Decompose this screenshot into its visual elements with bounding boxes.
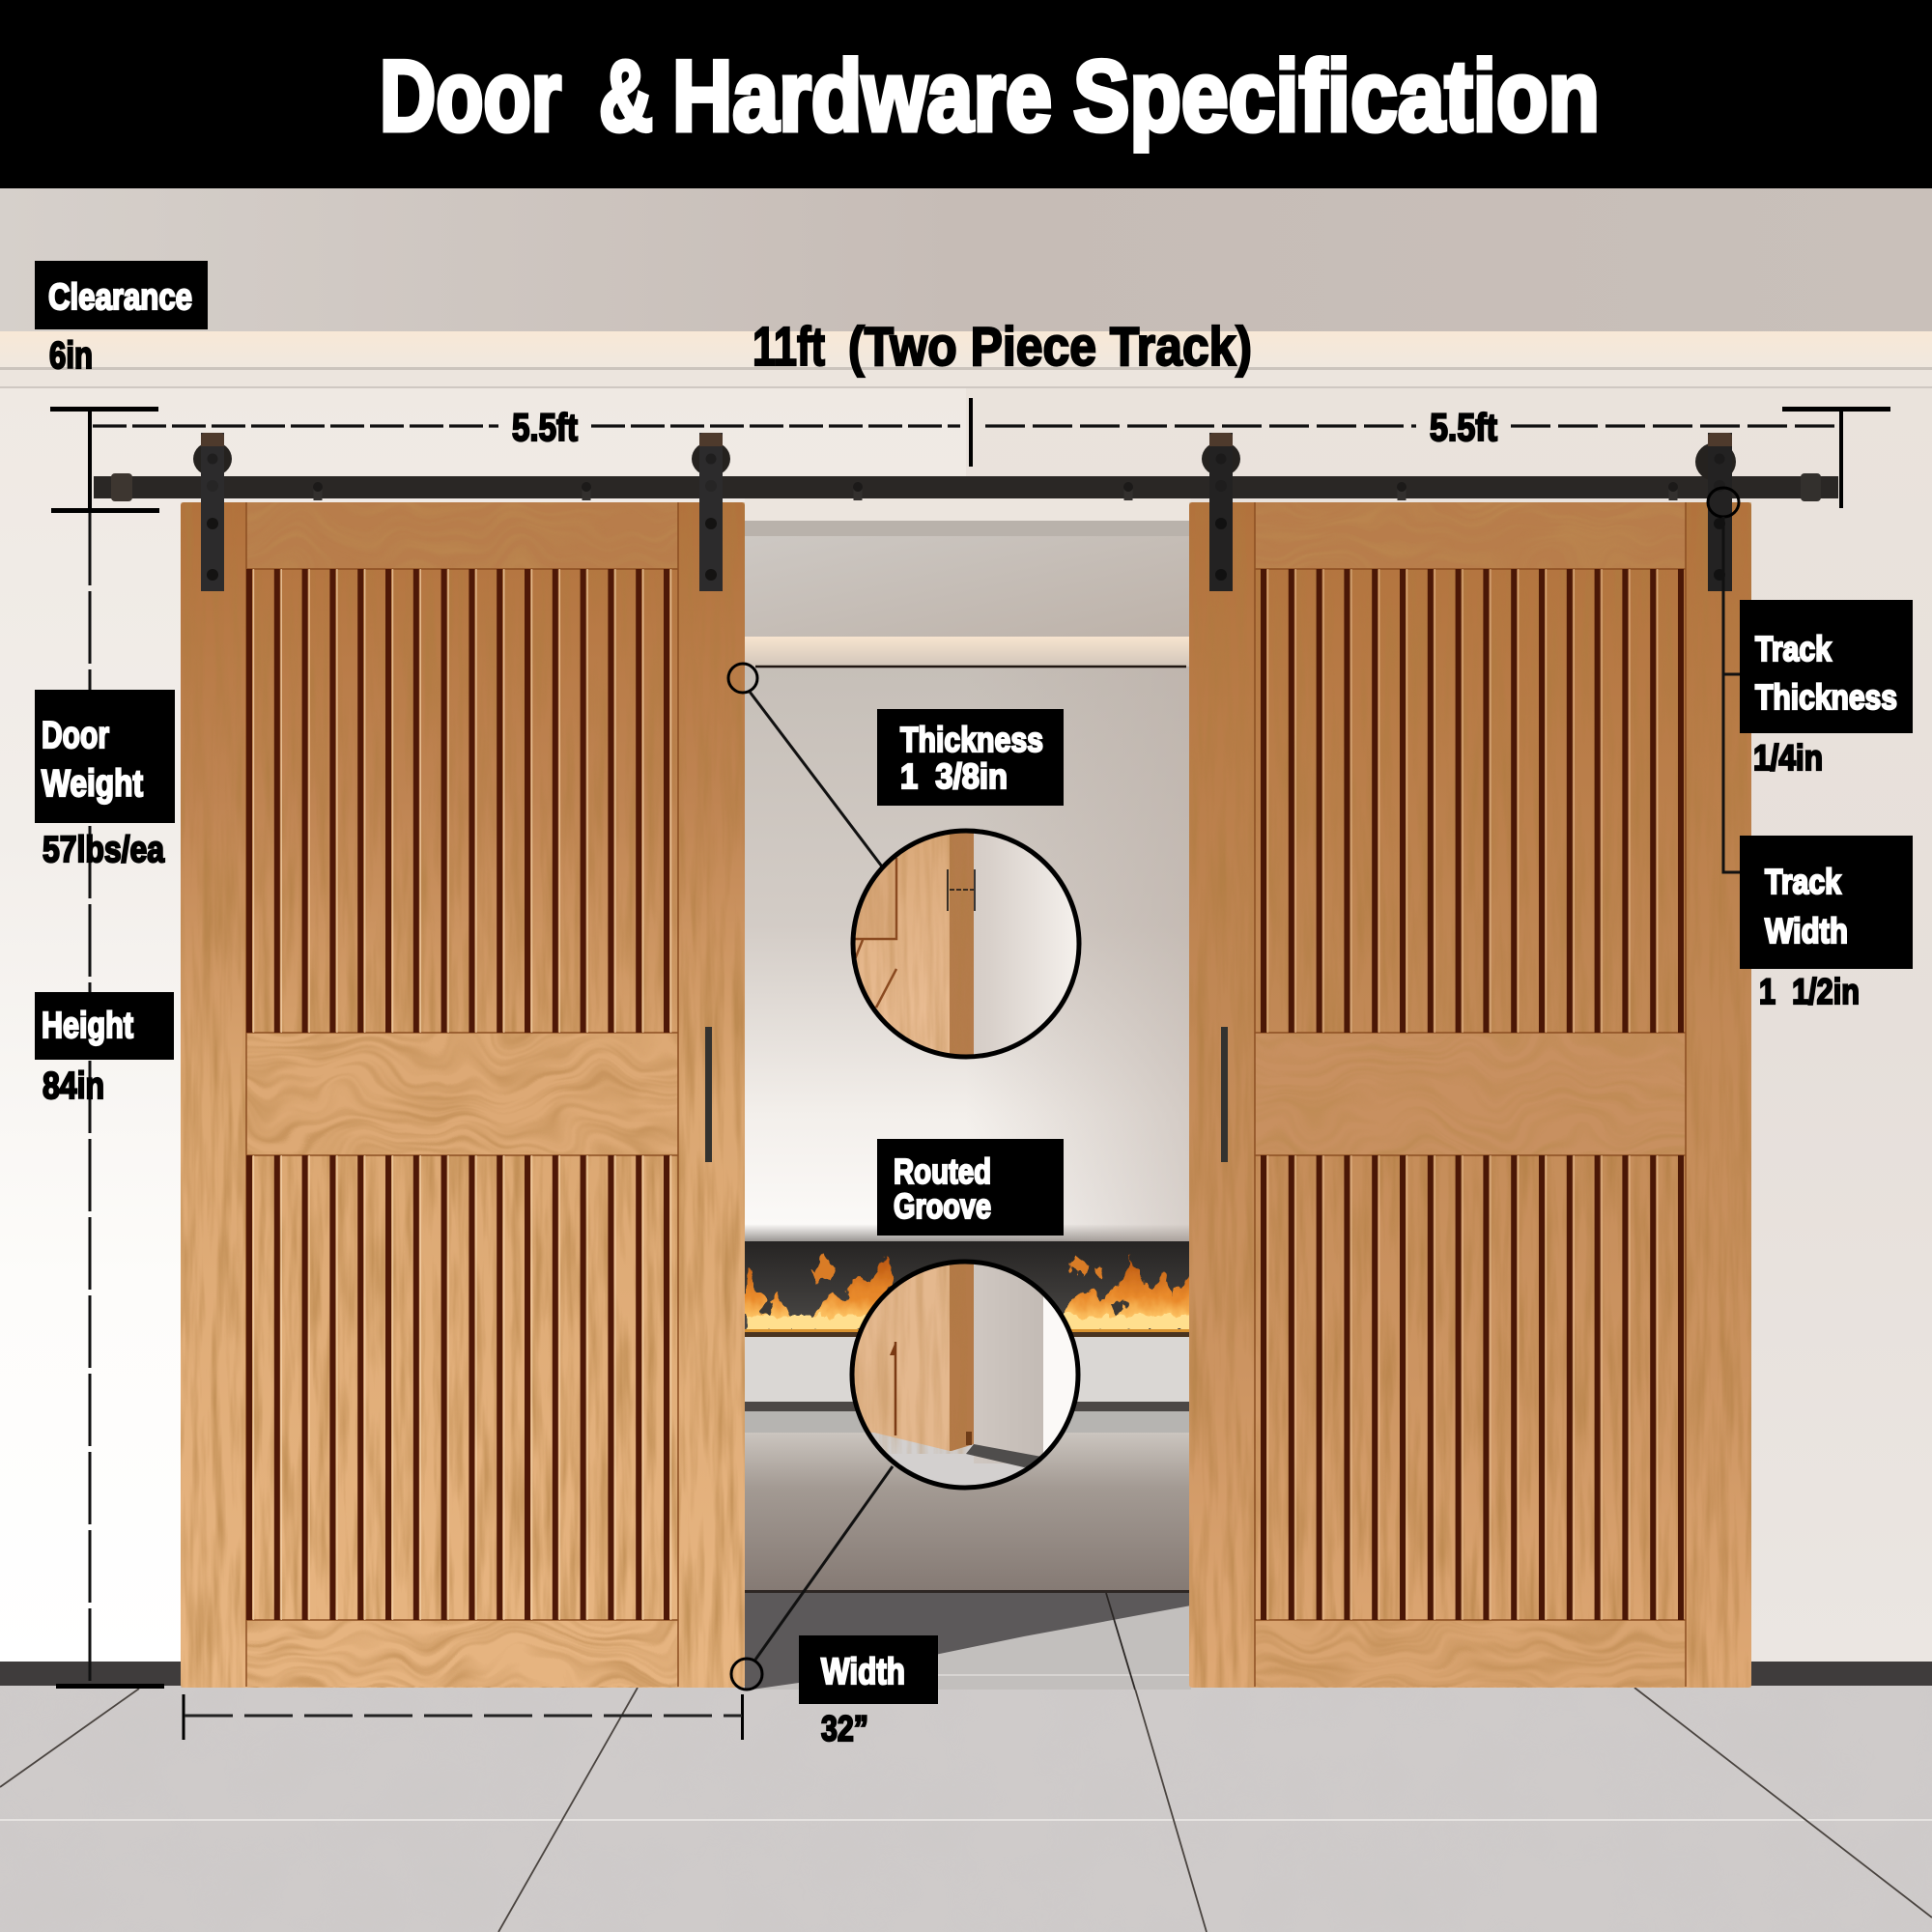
title: &	[599, 41, 653, 153]
right door rails	[1254, 502, 1687, 1687]
track stop left	[111, 473, 132, 501]
left door handle	[705, 1027, 712, 1162]
hanger 2	[692, 433, 730, 591]
track thickness callout: Thickness	[1755, 677, 1897, 717]
track thickness and width leader	[1708, 488, 1740, 872]
left door rails	[245, 502, 679, 1687]
track width callout: Track	[1765, 862, 1842, 901]
height callout	[35, 992, 174, 1107]
hanger 3	[1202, 433, 1240, 591]
clearance callout	[35, 261, 208, 377]
clearance callout: 6in	[49, 335, 93, 377]
left door grooves	[249, 569, 667, 1620]
right door	[1189, 502, 1751, 1688]
hanger 1	[193, 433, 232, 591]
door weight callout: Weight	[42, 763, 143, 805]
track length label: (Two Piece Track)	[848, 316, 1252, 378]
wall and ceiling background	[0, 188, 1932, 1663]
title: Specification	[1073, 41, 1600, 153]
track thickness callout: Track	[1755, 629, 1833, 668]
baseboard	[0, 1662, 1932, 1686]
height callout: Height	[42, 1006, 133, 1046]
height dashed dimension	[56, 513, 164, 1689]
track span dashed dimension	[93, 398, 1839, 467]
width callout: Width	[821, 1652, 905, 1692]
width callout	[799, 1635, 938, 1748]
thickness leader line	[728, 664, 1186, 867]
width callout: 32”	[821, 1709, 868, 1748]
header bar	[0, 0, 1932, 188]
thickness magnifier lens	[850, 826, 1082, 1063]
floor	[0, 1686, 1932, 1932]
thickness callout: Thickness	[900, 720, 1043, 759]
track width callout: 1 1/2in	[1759, 972, 1860, 1011]
title: Door	[380, 41, 561, 153]
door weight callout	[35, 690, 175, 870]
door weight callout: 57lbs/ea	[43, 830, 165, 870]
clearance callout: Clearance	[48, 277, 192, 318]
thickness callout: 1 3/8in	[900, 756, 1008, 796]
routed groove magnifier lens	[850, 1256, 1082, 1492]
right span label: 5.5ft	[1430, 407, 1497, 449]
track thickness callout	[1740, 600, 1913, 778]
track width callout	[1740, 836, 1913, 1011]
doorway interior scene	[745, 498, 1191, 1690]
routed groove callout: Groove	[894, 1186, 991, 1226]
fireplace band	[745, 1241, 1191, 1329]
width leader line	[731, 1466, 893, 1690]
routed groove callout	[877, 1139, 1064, 1236]
title: Hardware	[672, 41, 1052, 153]
routed groove callout: Routed	[894, 1151, 991, 1191]
track thickness callout: 1/4in	[1753, 738, 1823, 778]
right door handle	[1221, 1027, 1228, 1162]
title	[380, 41, 1600, 153]
thickness callout	[877, 709, 1064, 806]
clearance dimension bracket	[50, 407, 159, 513]
track rail	[94, 473, 1838, 501]
track stop right	[1801, 473, 1821, 501]
track width callout: Width	[1765, 911, 1848, 951]
hanger 4	[1695, 433, 1736, 591]
left door	[181, 502, 745, 1688]
track length label: 11ft	[753, 316, 825, 378]
door width dimension	[182, 1694, 744, 1740]
right door grooves	[1264, 569, 1681, 1620]
height callout: 84in	[43, 1065, 104, 1107]
center tick	[969, 398, 973, 467]
left span label: 5.5ft	[512, 407, 578, 449]
flames	[745, 1256, 1191, 1331]
door weight callout: Door	[42, 715, 109, 756]
right track end bracket	[1782, 407, 1890, 508]
